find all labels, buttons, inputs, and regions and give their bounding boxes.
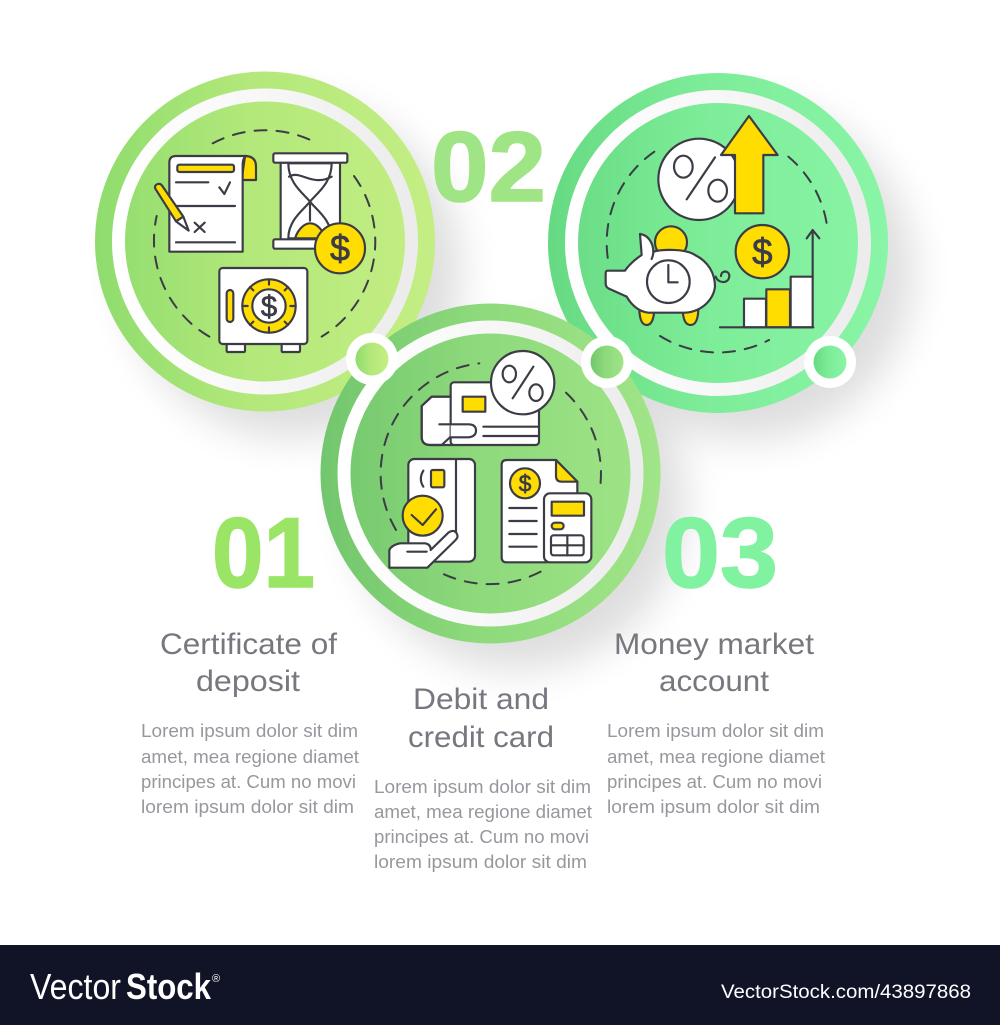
connector dot: circle one (346, 333, 398, 385)
footer logo: Stock (126, 966, 212, 1007)
text block: money market account (607, 721, 825, 817)
icon: percent circle (491, 351, 554, 414)
icon: growth bar chart (720, 230, 819, 327)
icon: credit card in hand (422, 382, 539, 445)
heading: certificate of deposit (160, 628, 338, 698)
footer logo: Vector (30, 966, 121, 1007)
footer logo (30, 966, 220, 1007)
heading: certificate of deposit: Certificate of (160, 628, 338, 661)
text block: certificate of deposit: lorem ipsum dolor sit dim (141, 797, 354, 817)
number 02: 02 (431, 111, 546, 222)
connector dot: circle three (581, 336, 633, 388)
icon: hourglass with coin (273, 153, 365, 273)
icon: bill and calculator (502, 460, 591, 562)
icon: piggy bank with clock (606, 226, 729, 325)
panel: certificate of deposit circle (95, 72, 435, 412)
text block: money market account: principes at. Cum no movi (607, 772, 822, 792)
text block: certificate of deposit: Lorem ipsum dolor sit dim (141, 721, 358, 741)
text block: debit and credit card: principes at. Cum no movi (374, 827, 589, 847)
text block: certificate of deposit: principes at. Cum no movi (141, 772, 356, 792)
heading: money market account (614, 628, 815, 698)
icons: card group (381, 351, 601, 584)
heading: money market account: Money market (614, 628, 815, 661)
text block: money market account: lorem ipsum dolor sit dim (607, 797, 820, 817)
text block: debit and credit card: Lorem ipsum dolor sit dim (374, 777, 591, 797)
number 01: 01 (212, 497, 315, 608)
text block: money market account: Lorem ipsum dolor sit dim (607, 721, 824, 741)
connector dot: circle two (804, 336, 856, 388)
icon: percent bubble (658, 139, 740, 220)
heading: certificate of deposit: deposit (196, 665, 301, 698)
icon: safe (219, 268, 307, 352)
icons: money market group: $ (752, 232, 773, 273)
footer image id: VectorStock.com/43897868 (721, 982, 971, 1003)
text block: certificate of deposit (141, 721, 359, 817)
text block: certificate of deposit: amet, mea regione diamet (141, 747, 359, 767)
heading: debit and credit card: Debit and (413, 683, 549, 716)
icon: card with approval on hand (389, 459, 475, 568)
text block: debit and credit card (374, 777, 592, 872)
heading: debit and credit card (408, 683, 554, 754)
icons: certificate group (154, 130, 375, 352)
text block: money market account: amet, mea regione diamet (607, 747, 825, 767)
icon: up arrow (721, 116, 778, 213)
icons: money market group (606, 116, 827, 352)
icons: certificate group: $ (261, 291, 277, 324)
panel: money market account circle (548, 73, 888, 413)
footer logo: ® (212, 973, 220, 985)
heading: debit and credit card: credit card (408, 721, 554, 754)
icon: pencil (155, 184, 189, 231)
number 03: 03 (662, 497, 778, 608)
heading: money market account: account (659, 665, 770, 698)
panel: debit and credit card circle (320, 304, 660, 644)
icons: card group: $ (519, 471, 532, 497)
icon: contract document (169, 156, 256, 252)
icon: dollar coin (736, 225, 789, 278)
text block: debit and credit card: lorem ipsum dolor sit dim (374, 852, 587, 872)
text block: debit and credit card: amet, mea regione diamet (374, 802, 592, 822)
circle shadows (125, 102, 914, 670)
icons: certificate group: $ (330, 228, 350, 269)
footer bar (0, 945, 1000, 1025)
